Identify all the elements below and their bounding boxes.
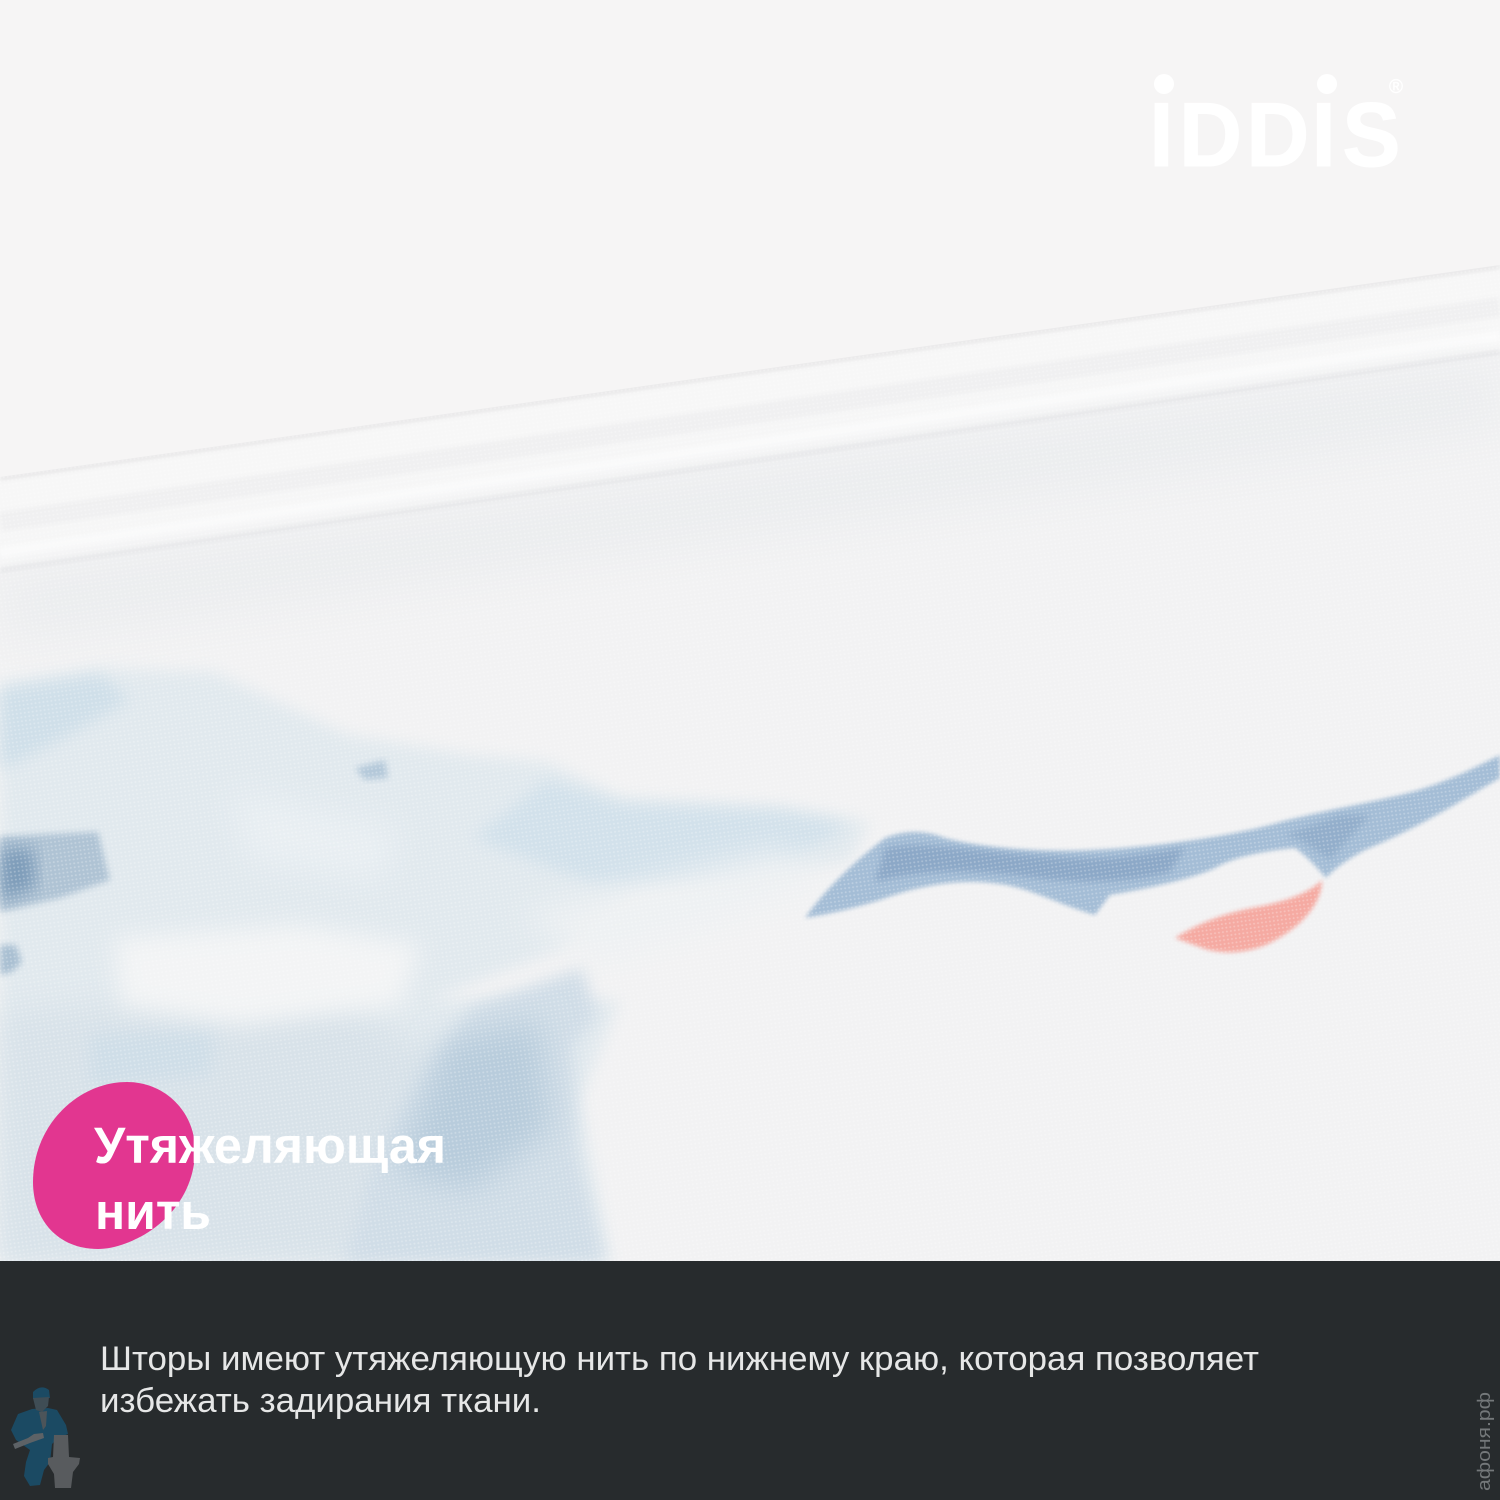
fabric shade below hem: [0, 395, 1500, 610]
curtain hem band: [0, 265, 1500, 570]
watercolor print: bird wing: [805, 755, 1500, 918]
watercolor print: pale blue wash: [0, 668, 870, 1262]
watercolor print: red beak: [1175, 880, 1322, 952]
plumber face: [33, 1397, 49, 1412]
heading: нить: [95, 1183, 211, 1240]
logo: iDDiS: IDDIS: [1149, 83, 1400, 185]
text block: description: избежать задирания ткани.: [100, 1382, 541, 1420]
fabric weave texture: [0, 674, 1500, 1261]
plumber shirt: [39, 1411, 47, 1430]
panel: dark footer band: [0, 1261, 1500, 1500]
toilet: [48, 1435, 80, 1488]
pink blob: [33, 1082, 195, 1249]
watermark text: афоня.рф: [1474, 1392, 1494, 1491]
plumber figure: [11, 1387, 68, 1486]
logo: iDDiS: ®: [1389, 77, 1403, 98]
text block: description: Шторы имеют утяжеляющую нить по нижнему краю, которая позволяет: [100, 1340, 1259, 1378]
watercolor print: blue leg stroke: [345, 968, 605, 1262]
watercolor print: dark left strokes: [0, 760, 388, 975]
panel: curtain fabric: [0, 260, 1500, 1262]
icon: plumber with toilet: [11, 1387, 80, 1488]
wrench: [13, 1433, 44, 1449]
heading: Утяжеляющая: [94, 1117, 446, 1174]
